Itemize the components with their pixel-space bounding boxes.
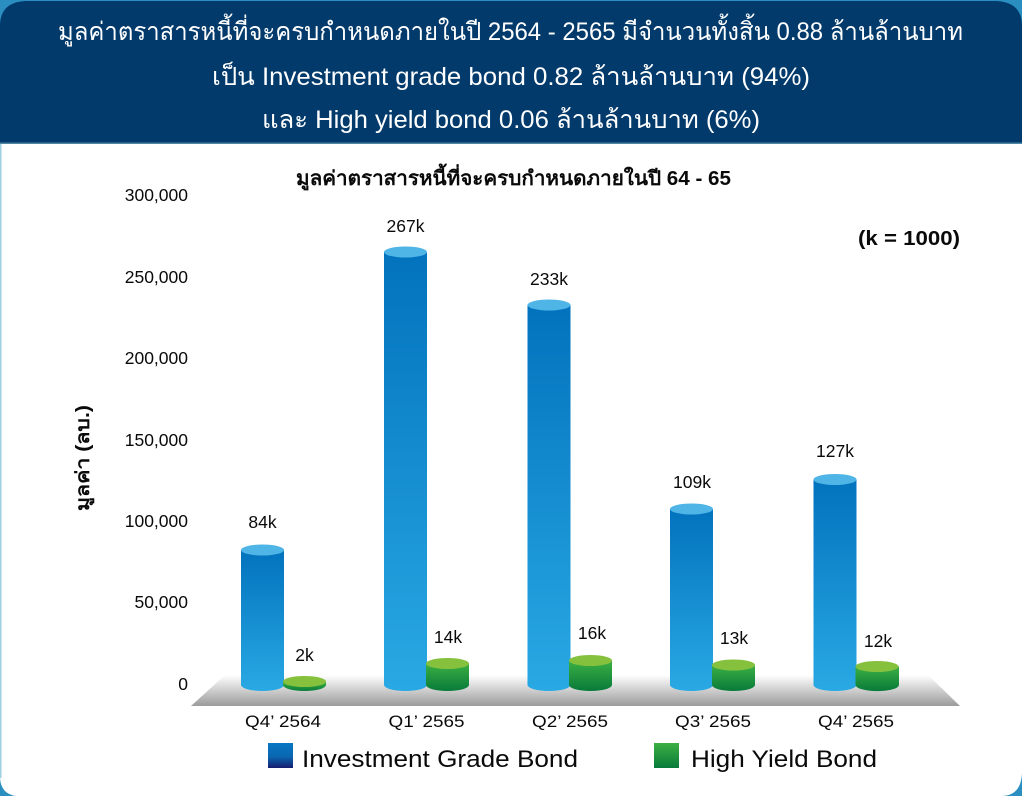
value labels: 233k: [530, 269, 568, 289]
legend swatch: investment grade: [268, 743, 293, 768]
x axis labels: Q1’ 2565: [388, 712, 464, 731]
y axis labels: 100,000: [125, 511, 188, 531]
value labels: 2k: [295, 645, 314, 665]
y axis labels: 250,000: [125, 267, 188, 287]
bar: Q4 2564 investment grade: [241, 544, 284, 691]
x axis labels: Q4’ 2565: [818, 712, 894, 731]
legend label: investment grade: Investment Grade Bond: [302, 746, 578, 773]
value labels: 127k: [816, 441, 854, 461]
y axis labels: 150,000: [125, 430, 188, 450]
y axis labels: 300,000: [125, 185, 188, 205]
y axis labels: 0: [178, 674, 188, 694]
value labels: 13k: [720, 628, 748, 648]
bar: Q4 2565 investment grade: [814, 474, 856, 691]
legend: [268, 743, 877, 773]
bar: Q4 2565 high yield: [856, 661, 899, 691]
legend swatch: high yield: [654, 743, 679, 768]
bar: Q1 2565 investment grade: [384, 246, 427, 691]
header banner: [0, 1, 1022, 144]
chart title: มูลค่าตราสารหนี้ที่จะครบกำหนดภายในปี 64 - 65: [296, 163, 731, 192]
value labels: 14k: [434, 627, 462, 647]
bars: Investment Grade Bond: [241, 246, 856, 691]
y axis labels: 200,000: [125, 348, 188, 368]
bar: Q1 2565 high yield: [426, 658, 469, 691]
y axis title: มูลค่า (ลบ.): [73, 405, 95, 511]
value labels: 16k: [578, 623, 606, 643]
chart floor: [191, 675, 960, 706]
bar: Q3 2565 high yield: [712, 660, 755, 691]
value labels: 12k: [864, 631, 892, 651]
header line 1: มูลค่าตราสารหนี้ที่จะครบกำหนดภายในปี 2564 - 2565 มีจำนวนทั้งสิ้น 0.88 ล้านล้านบาท: [58, 13, 963, 47]
header line 2: เป็น Investment grade bond 0.82 ล้านล้านบาท (94%): [212, 61, 810, 91]
y axis labels: 50,000: [134, 592, 188, 612]
x axis labels: Q3’ 2565: [675, 712, 751, 731]
legend label: high yield: High Yield Bond: [691, 746, 877, 773]
unit note: (k = 1000): [858, 228, 960, 250]
value labels: [248, 216, 892, 665]
bar: Q4 2564 high yield: [283, 676, 326, 691]
value labels: 267k: [387, 216, 425, 236]
bar: Q3 2565 investment grade: [670, 504, 713, 691]
value labels: 109k: [673, 472, 711, 492]
x axis labels: [245, 712, 894, 731]
header line 3: และ High yield bond 0.06 ล้านล้านบาท (6%): [262, 106, 760, 134]
bar: Q2 2565 investment grade: [528, 300, 570, 691]
x axis labels: Q4’ 2564: [245, 712, 321, 731]
x axis labels: Q2’ 2565: [532, 712, 608, 731]
bar: Q2 2565 high yield: [569, 655, 612, 691]
y axis labels: [125, 185, 188, 694]
bars: High Yield Bond: [283, 655, 899, 691]
value labels: 84k: [248, 512, 277, 532]
